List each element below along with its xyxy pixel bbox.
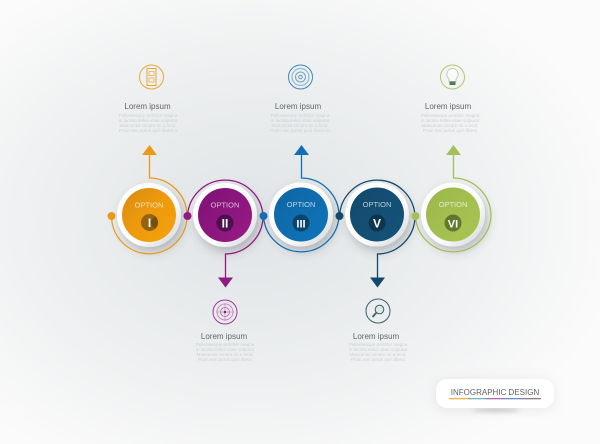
badge III: III	[296, 218, 306, 230]
option III: blue node	[260, 145, 339, 252]
text block: bottom left: Pellentesque porttitor magna	[196, 342, 255, 347]
connector III with arrow	[260, 145, 339, 252]
label OPTION V: OPTION	[363, 200, 391, 209]
connector VI with arrow	[412, 145, 491, 252]
label OPTION II: OPTION	[211, 200, 239, 210]
text block: top left: Lorem ipsum	[124, 102, 171, 111]
text block: bottom right: in lacinia tellus vitae vulputat	[349, 347, 408, 352]
text block: bottom left: Lorem ipsum	[201, 332, 247, 341]
text block: top right: in lacinia tellus vitae vulputat	[421, 118, 480, 123]
text block: top right	[421, 102, 480, 133]
disc VI	[421, 182, 485, 246]
icon: wheel	[288, 65, 312, 89]
option II: purple node	[184, 180, 263, 288]
text block: top center	[270, 102, 330, 133]
badge V: V	[373, 216, 381, 230]
badge VI: VI	[448, 218, 458, 230]
text block: bottom left: Maecenas ornare mi a lend.	[197, 352, 253, 357]
text block: top right: Pellentesque porttitor magna	[421, 113, 480, 118]
text block: top center: in lacinia tellus vitae vulputat	[271, 118, 330, 123]
label OPTION VI: OPTION	[439, 200, 467, 209]
text block: bottom left: Proin nec purus quis libero	[198, 357, 253, 362]
text block: top right: Maecenas ornare mi a lend.	[422, 123, 478, 128]
label OPTION I: OPTION	[135, 200, 163, 210]
icon: light bulb	[440, 65, 464, 89]
icon: magnifier	[366, 299, 390, 323]
badge I: I	[148, 216, 151, 230]
icon: target	[213, 300, 237, 324]
text block: top center: Maecenas ornare mi a lend.	[272, 123, 328, 128]
badge: infographic design	[436, 379, 554, 411]
text block: bottom right: Lorem ipsum	[353, 332, 399, 341]
label OPTION III: OPTION	[287, 200, 315, 209]
text block: bottom right: Proin nec purus quis libero	[351, 357, 406, 362]
disc V	[345, 182, 409, 246]
text block: top left: Pellentesque porttitor magna	[119, 113, 178, 118]
option I: orange node	[108, 145, 187, 254]
connector II with arrow	[184, 180, 263, 288]
badge II: II	[222, 216, 228, 230]
text block: top center: Pellentesque porttitor magna	[271, 113, 330, 118]
disc I	[117, 183, 181, 247]
text block: top left: in lacinia tellus vitae vulputat	[119, 118, 178, 123]
connector I with arrow	[108, 145, 187, 254]
text block: bottom left: in lacinia tellus vitae vulputat	[196, 347, 255, 352]
text block: bottom right	[349, 332, 408, 362]
disc III	[269, 182, 333, 246]
option VI: green node	[412, 145, 491, 252]
text block: bottom right: Maecenas ornare mi a lend.	[350, 352, 406, 357]
option V: navy node	[336, 180, 415, 288]
disc II	[193, 183, 257, 247]
text block: top right: Proin nec purus quis libero	[423, 128, 478, 133]
text block: top center: Proin nec purus quis libero ut	[270, 128, 330, 133]
connector V with arrow	[336, 180, 415, 288]
rainbow underline	[449, 398, 541, 399]
text block: bottom right: Pellentesque porttitor magna	[349, 342, 408, 347]
text block: bottom left	[196, 332, 255, 362]
text block: top right: Lorem ipsum	[425, 102, 471, 111]
badge: infographic design: INFOGRAPHIC DESIGN	[451, 388, 539, 397]
text block: top left: Proin nec purus quis libero o	[119, 128, 178, 133]
text block: top left	[119, 102, 178, 133]
text block: top left: Maecenas ornare mi a lend.	[120, 123, 176, 128]
text block: top center: Lorem ipsum	[275, 102, 321, 111]
icon: film strip	[140, 65, 164, 89]
